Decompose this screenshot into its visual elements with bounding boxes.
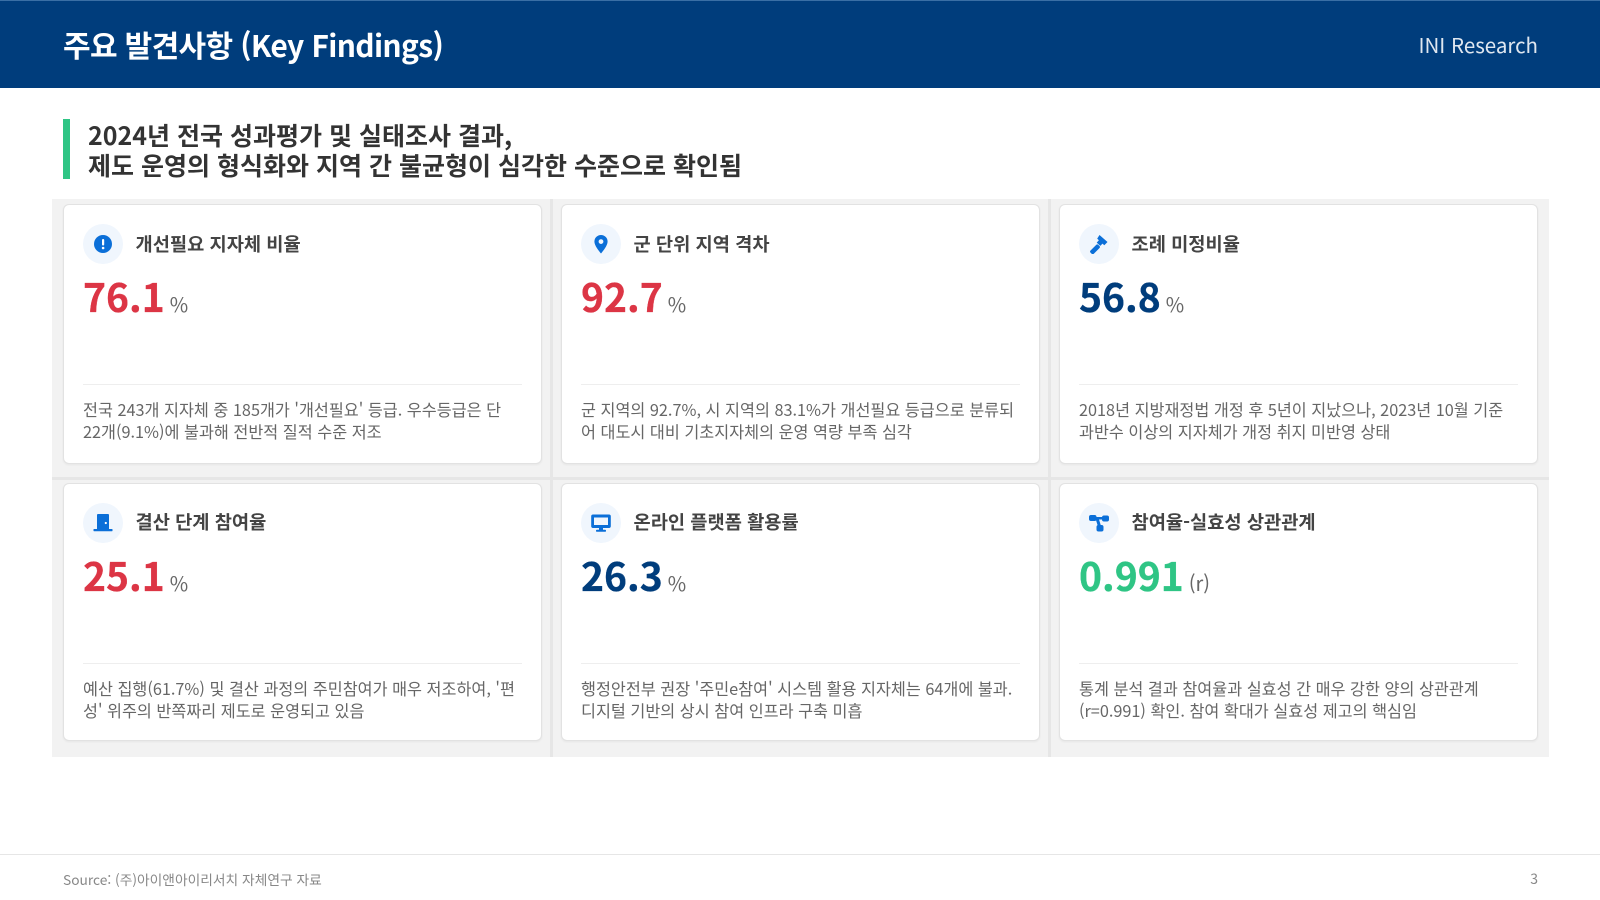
subtitle: 제도 운영의 형식화와 지역 간 불균형이 심각한 수준으로 확인됨 (88, 146, 742, 182)
source note: Source: (주)아이앤아이리서치 자체연구 자료 (63, 869, 322, 889)
card heading: 조례 미정비율 (1132, 230, 1240, 257)
description (581, 676, 1012, 722)
description: 행정안전부 권장 '주민e참여' 시스템 활용 지자체는 64개에 불과. (581, 676, 1012, 700)
description: 예산 집행(61.7%) 및 결산 과정의 주민참여가 매우 저조하여, '편 (83, 676, 515, 700)
metric value: 56.8% (1079, 268, 1184, 324)
metric value: 92.7% (581, 268, 686, 324)
description: 과반수 이상의 지자체가 개정 취지 미반영 상태 (1079, 419, 1390, 443)
panel: card correlation (1059, 483, 1538, 741)
panel: card ordinance (1059, 204, 1538, 464)
panel: card online platform (561, 483, 1040, 741)
organisation name: INI Research (1418, 29, 1538, 59)
description (581, 397, 1014, 443)
card heading: 참여율-실효성 상관관계 (1132, 508, 1316, 535)
description: 2018년 지방재정법 개정 후 5년이 지났으나, 2023년 10월 기준 (1079, 397, 1503, 421)
description: 22개(9.1%)에 불과해 전반적 질적 수준 저조 (83, 419, 382, 443)
description (83, 397, 501, 443)
description: (r=0.991) 확인. 참여 확대가 실효성 제고의 핵심임 (1079, 698, 1417, 722)
metric value: 0.991(r) (1079, 547, 1210, 603)
description (83, 676, 515, 722)
icon: diagram nodes (1079, 503, 1119, 543)
subtitle (88, 116, 742, 182)
card heading: 군 단위 지역 격차 (634, 230, 770, 257)
panel: card settlement participation (63, 483, 542, 741)
card heading: 결산 단계 참여율 (136, 508, 266, 535)
card heading: 온라인 플랫폼 활용률 (634, 508, 799, 535)
card heading: 개선필요 지자체 비율 (136, 230, 301, 257)
metric value: 26.3% (581, 547, 686, 603)
description: 디지털 기반의 상시 참여 인프라 구축 미흡 (581, 698, 862, 722)
accent bar (63, 119, 70, 179)
description: 전국 243개 지자체 중 185개가 '개선필요' 등급. 우수등급은 단 (83, 397, 501, 421)
panel: card county gap (561, 204, 1040, 464)
description: 어 대도시 대비 기초지자체의 운영 역량 부족 심각 (581, 419, 912, 443)
metric value: 76.1% (83, 268, 188, 324)
icon: exclamation circle (83, 224, 123, 264)
description (1079, 397, 1503, 443)
page number: 3 (1530, 869, 1538, 889)
description (1079, 676, 1479, 722)
icon: monitor (581, 503, 621, 543)
panel: findings grid (52, 199, 1549, 757)
panel: card improvement-needed ratio (63, 204, 542, 464)
description: 통계 분석 결과 참여율과 실효성 간 매우 강한 양의 상관관계 (1079, 676, 1479, 700)
icon: location pin (581, 224, 621, 264)
icon: door (83, 503, 123, 543)
title: 주요 발견사항 (Key Findings) (63, 22, 443, 66)
description: 성' 위주의 반쪽짜리 제도로 운영되고 있음 (83, 698, 364, 722)
icon: gavel (1079, 224, 1119, 264)
subtitle: 2024년 전국 성과평가 및 실태조사 결과, (88, 116, 512, 152)
description: 군 지역의 92.7%, 시 지역의 83.1%가 개선필요 등급으로 분류되 (581, 397, 1014, 421)
header bar (0, 0, 1600, 88)
metric value: 25.1% (83, 547, 188, 603)
